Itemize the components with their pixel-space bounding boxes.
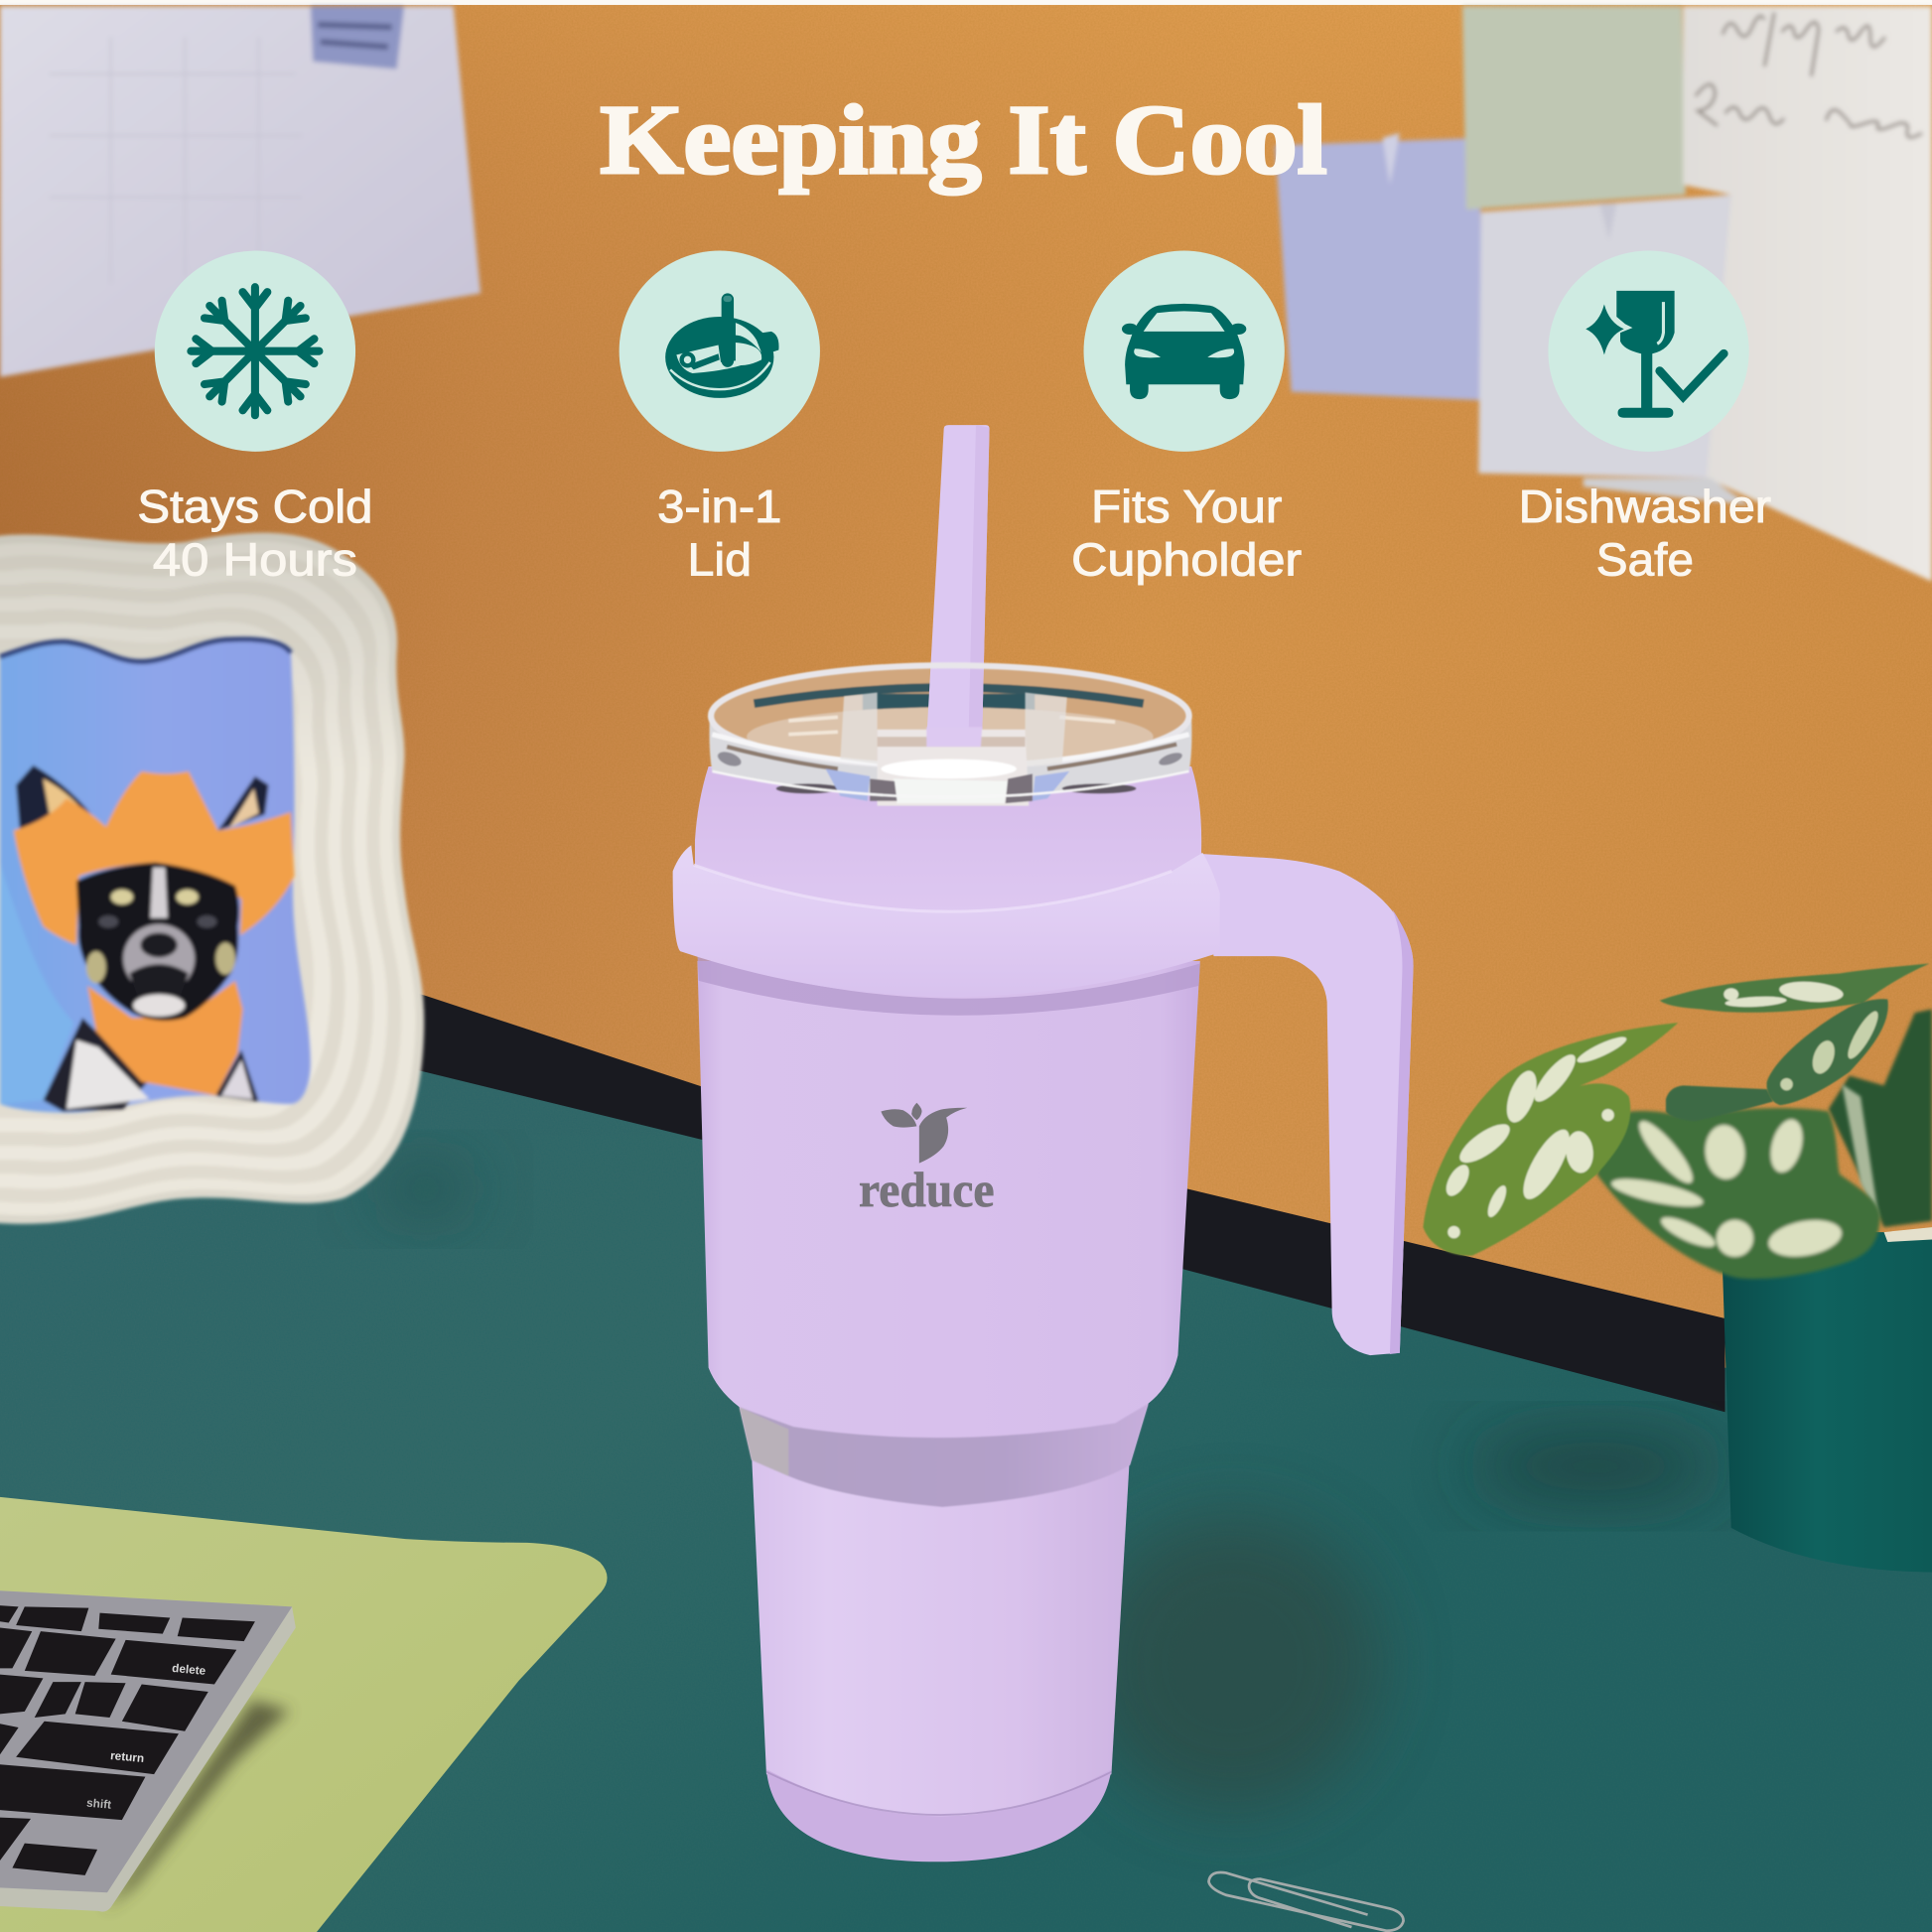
icon: wine glass with sparkle and check [1586,291,1724,418]
feature: stays cold: 40 Hours [153,534,357,586]
dog face [76,863,239,1021]
plant in teal pot [1423,964,1932,1573]
icon: lid [665,293,779,398]
dog body [43,1018,148,1111]
bandana [87,981,242,1095]
feature: fits your cupholder: Cupholder [1071,534,1302,586]
illegible handwriting scribbles [1696,12,1922,137]
label: 3-in-1 [657,481,781,532]
feature: fits your cupholder [1071,251,1302,586]
shadows on desk [376,1162,1719,1811]
icon: snowflake [191,287,319,415]
lid back [709,663,1191,766]
leaf: upper right [1767,999,1888,1105]
picture frame with dog portrait [0,533,424,1224]
handle [1202,854,1414,1355]
tumbler: purple mug with straw, lid and handle [673,425,1414,1862]
background: pinned papers left [0,6,481,377]
keyboard [0,1590,296,1912]
dark foliage [1829,1009,1932,1227]
wavy ridged frame [0,533,424,1224]
keyboard: shift [86,1797,112,1812]
leaf: dark fold [1666,1085,1773,1121]
lid front [710,665,1191,806]
label: Fits Your [1091,481,1282,532]
leaf: top [1660,964,1930,1013]
leaf: large lower [1596,1108,1880,1279]
logo [859,1103,995,1217]
title: Keeping It Cool [600,86,1327,195]
label: Dishwasher [1519,481,1771,532]
logo: reduce [859,1163,995,1217]
ring [673,845,1220,997]
lower section [752,1453,1130,1818]
paperclip [1208,1872,1404,1931]
keyboard shadow [104,1701,290,1911]
photo [0,639,311,1113]
icon: car [1122,304,1246,399]
background: desk [0,980,1932,1932]
keyboard: delete [172,1662,207,1678]
ring shadow [697,955,1200,1016]
base [766,1769,1111,1862]
background: pinned notes right [1276,6,1932,582]
upper body [695,766,1201,936]
feature: dishwasher safe [1519,251,1771,586]
feature: stays cold [137,251,372,586]
main body [697,961,1200,1495]
label: Stays Cold [137,481,372,532]
dog ears [16,765,100,830]
keyboard: return [110,1749,145,1765]
feature: 3-in-1 lid: Lid [688,534,752,586]
hat [14,771,295,945]
background: cork wall [0,0,1932,1430]
feature: 3-in-1 lid [620,251,820,586]
baseboard [369,980,1725,1412]
feature: dishwasher safe: Safe [1596,534,1694,586]
leaf: bright left [1423,1023,1678,1256]
desk mat [0,1497,608,1932]
straw [926,425,990,740]
waist shadow band [740,1404,1149,1507]
